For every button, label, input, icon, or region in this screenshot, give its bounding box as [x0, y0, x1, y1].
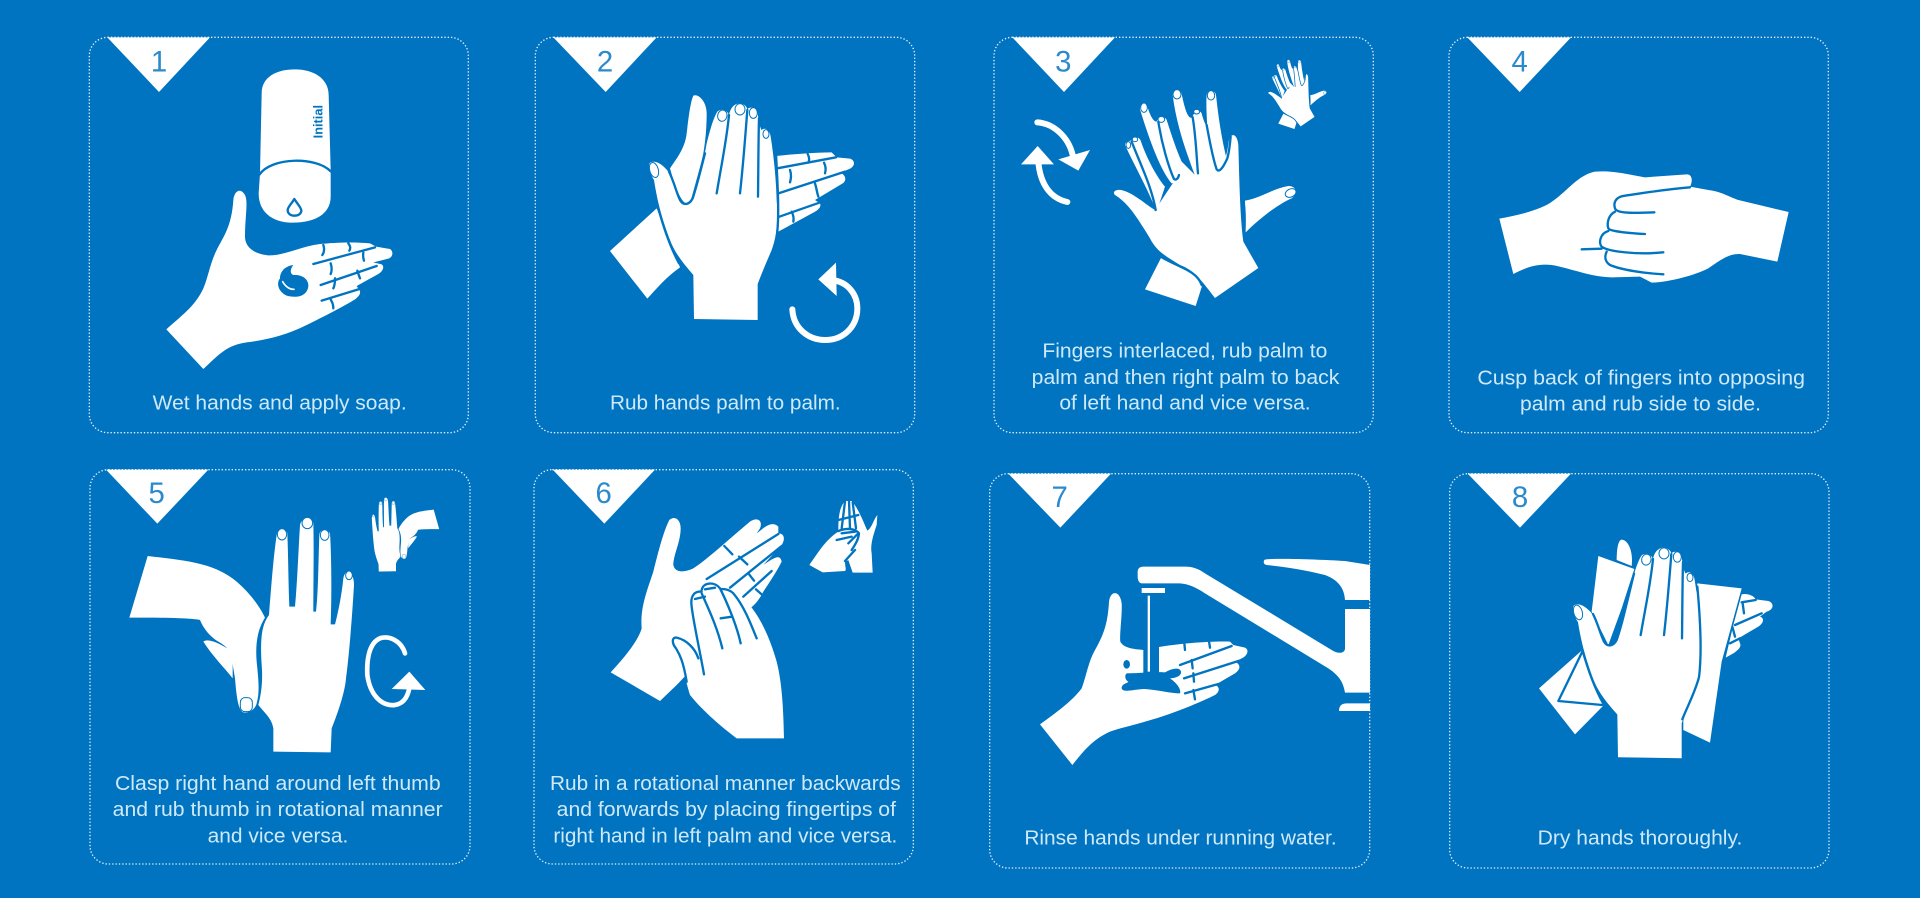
panel: step 7 rinse under running water — [990, 474, 1370, 868]
caption: Fingers interlaced, rub palm to — [1042, 340, 1327, 363]
number badge 1: 1 — [151, 45, 167, 78]
caption: palm and rub side to side. — [1520, 393, 1761, 416]
arrow: counter-clockwise rotation — [792, 263, 857, 340]
caption: Cusp back of fingers into opposing — [1477, 366, 1805, 389]
icon: soap dispenser — [259, 69, 331, 223]
icon: interlaced hands — [1114, 90, 1297, 306]
icon: mini fingertip view — [809, 501, 877, 573]
caption: and rub thumb in rotational manner — [113, 798, 443, 821]
caption: of left hand and vice versa. — [1059, 391, 1311, 414]
caption: palm and then right palm to back — [1032, 366, 1340, 389]
arrow: swap circular arrows — [1021, 122, 1090, 202]
panel: step 5 clasp thumb — [90, 470, 470, 864]
icon: soap dispenser: Initial — [310, 105, 325, 138]
icon: hands with paper towel — [1539, 540, 1773, 758]
caption — [1032, 340, 1340, 414]
caption: and forwards by placing fingertips of — [557, 798, 896, 821]
number badge 3: 3 — [1055, 45, 1071, 78]
caption: Dry hands thoroughly. — [1538, 826, 1742, 849]
icon: open hand with soap — [166, 191, 392, 369]
icon: two hands palm to palm — [610, 95, 854, 320]
caption: Rub hands palm to palm. — [610, 391, 841, 414]
number badge 8: 8 — [1512, 481, 1528, 514]
icon: faucet — [1138, 559, 1370, 711]
caption — [113, 772, 443, 848]
panel: step 6 rotational fingertips — [534, 470, 913, 864]
number badge 8 — [1468, 474, 1571, 528]
number badge 2: 2 — [597, 45, 613, 78]
caption: right hand in left palm and vice versa. — [553, 825, 897, 848]
number badge 7 — [1008, 474, 1111, 528]
icon: mini clasp view — [372, 497, 439, 572]
icon: cupped hands — [1499, 171, 1789, 283]
number badge 4: 4 — [1512, 45, 1528, 78]
panel: step 8 dry hands — [1450, 474, 1829, 868]
caption — [550, 772, 901, 848]
number badge 1 — [107, 37, 210, 92]
number badge 6 — [553, 470, 655, 524]
icon: fingertips in palm — [611, 518, 784, 748]
number badge 3 — [1012, 37, 1115, 92]
caption: Rub in a rotational manner backwards — [550, 772, 901, 795]
number badge 6: 6 — [596, 477, 612, 510]
caption: Clasp right hand around left thumb — [115, 772, 441, 795]
panel: step 4 cusp fingers — [1449, 37, 1828, 433]
icon: hand under water — [1040, 593, 1247, 765]
number badge 2 — [553, 37, 657, 92]
number badge 4 — [1467, 37, 1571, 92]
caption: Rinse hands under running water. — [1024, 826, 1337, 849]
caption: Wet hands and apply soap. — [153, 391, 407, 414]
number badge 5: 5 — [149, 477, 165, 510]
arrow: thumb rotation — [367, 637, 425, 705]
panel: step 2 rub hands palm to palm — [535, 37, 915, 433]
panel: step 1 wet hands and apply soap — [89, 37, 468, 433]
caption — [1477, 366, 1805, 416]
number badge 5 — [106, 470, 208, 524]
caption: and vice versa. — [208, 825, 348, 848]
icon: mini interlaced hands — [1268, 60, 1327, 129]
number badge 7: 7 — [1052, 481, 1068, 514]
panel: step 3 fingers interlaced — [994, 37, 1373, 433]
icon: hand clasping thumb — [129, 517, 354, 752]
